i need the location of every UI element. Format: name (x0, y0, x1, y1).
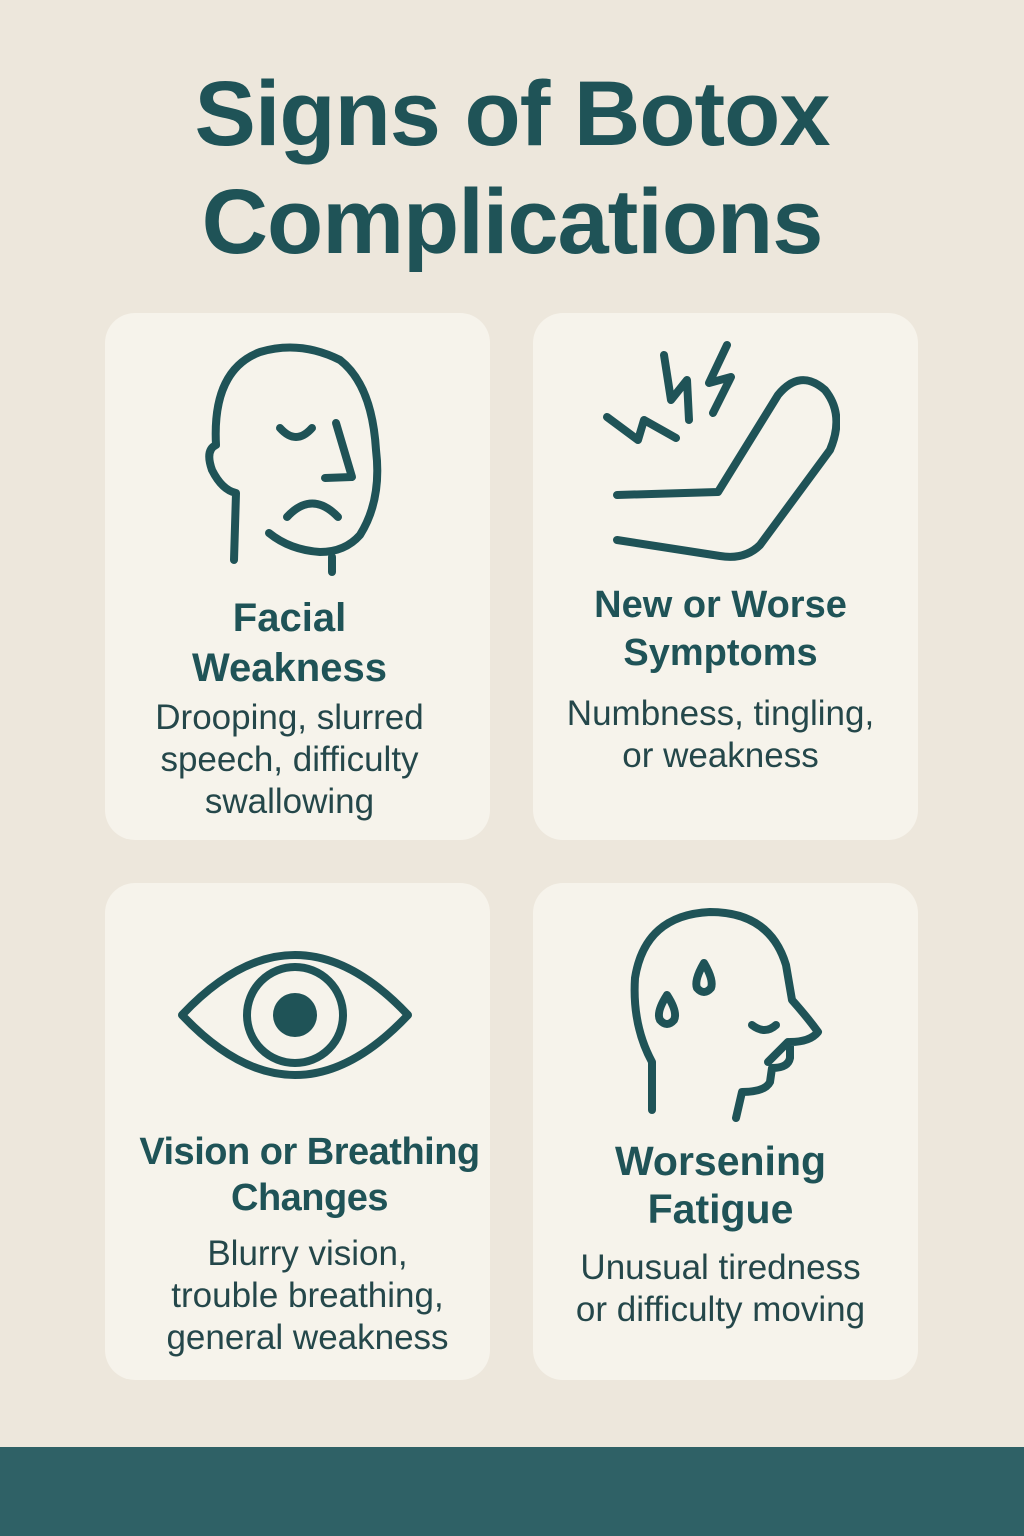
panel: worsening fatigue (533, 883, 918, 1380)
description: Unusual tiredness (580, 1248, 861, 1287)
description (567, 694, 874, 775)
footer bar (0, 1447, 1024, 1536)
heading: Symptoms (623, 632, 818, 674)
description (155, 698, 424, 821)
description: general weakness (166, 1318, 449, 1357)
description: Numbness, tingling, (567, 694, 874, 733)
heading: Worsening (615, 1138, 826, 1184)
icon: arm with lightning (603, 341, 840, 561)
heading (615, 1138, 826, 1232)
description: swallowing (205, 782, 374, 821)
panel: facial weakness (105, 313, 490, 840)
panel: new or worse symptoms (533, 313, 918, 840)
heading: New or Worse (594, 584, 847, 626)
heading: Fatigue (648, 1186, 793, 1232)
icon: tired head with sweat drops (630, 908, 822, 1122)
heading (192, 596, 387, 690)
heading (594, 584, 847, 674)
heading: Changes (231, 1177, 388, 1219)
description: speech, difficulty (160, 740, 419, 779)
description: Blurry vision, (207, 1234, 408, 1273)
description: or weakness (622, 736, 819, 775)
description: Drooping, slurred (155, 698, 424, 737)
title: Signs of Botox (194, 63, 830, 165)
heading (139, 1131, 480, 1219)
description (576, 1248, 865, 1329)
title: Complications (202, 171, 822, 273)
panel: vision or breathing changes (105, 883, 490, 1380)
icon: drooping face (205, 344, 382, 576)
heading: Facial (233, 596, 346, 640)
heading: Weakness (192, 646, 387, 690)
description (166, 1234, 449, 1357)
heading: Vision or Breathing (139, 1131, 480, 1173)
icon: eye (178, 951, 412, 1079)
description: or difficulty moving (576, 1290, 865, 1329)
title (194, 63, 830, 273)
description: trouble breathing, (171, 1276, 444, 1315)
